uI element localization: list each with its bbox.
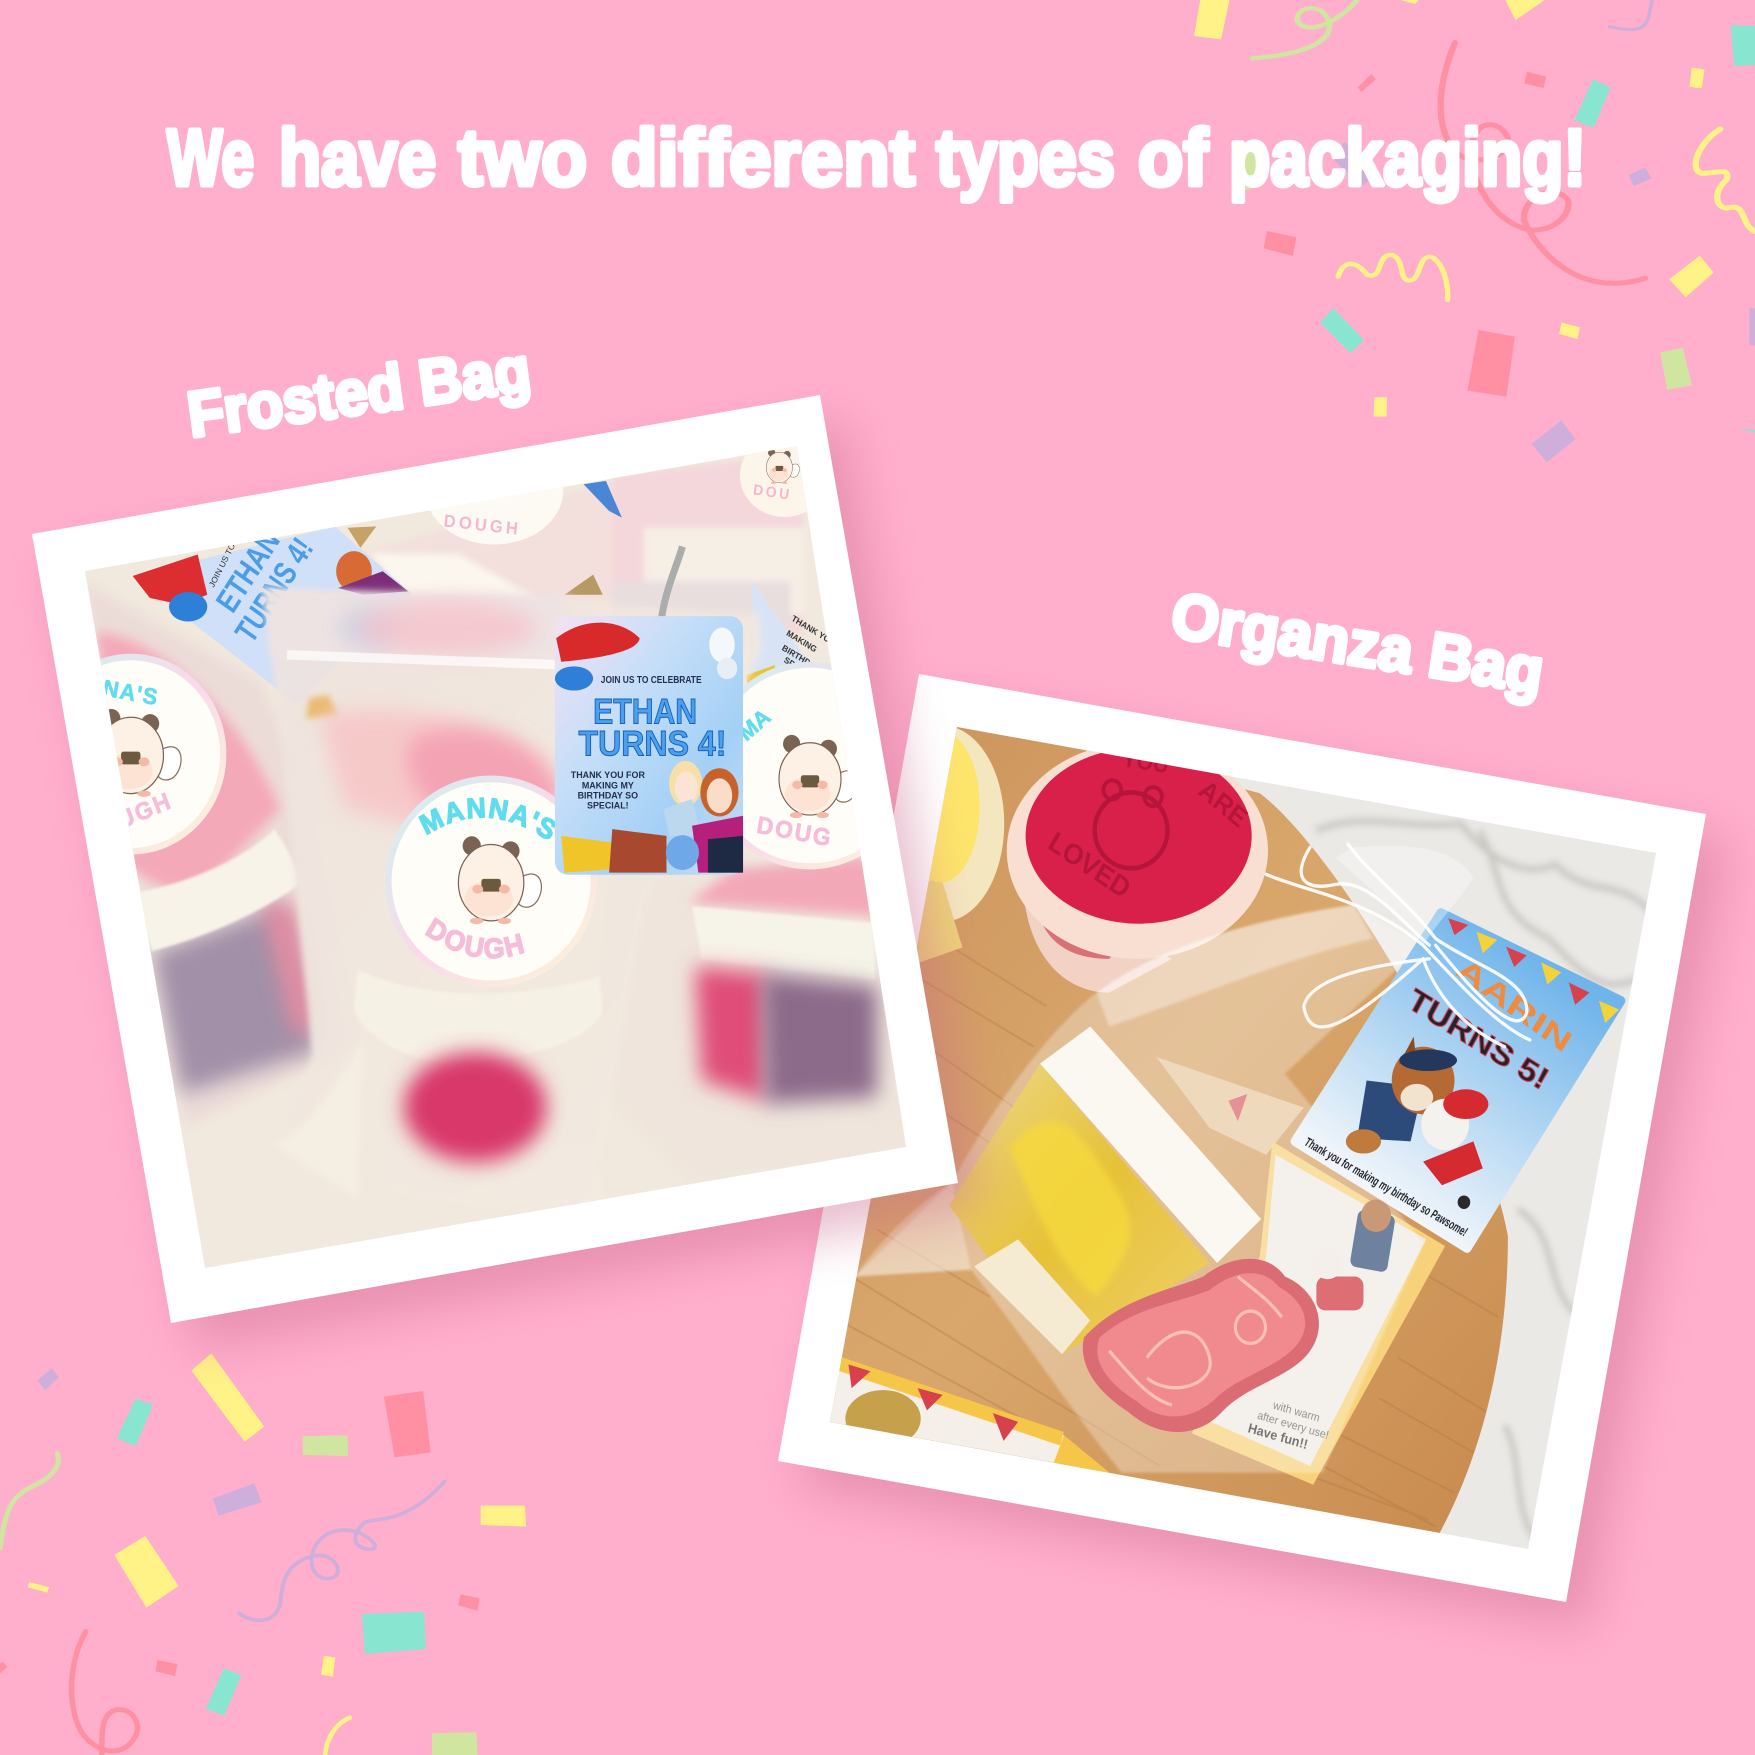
Elsa and Anna (663, 761, 743, 873)
gift tag: Ethan turns 4: JOIN US TO CELEBRATE (601, 675, 702, 686)
right jar bag: SPECIAL! (782, 655, 821, 684)
Manna's Dough sticker (385, 776, 597, 987)
Marshall (1421, 1089, 1488, 1209)
title: have (279, 113, 436, 202)
left jar bag: UGH (114, 787, 176, 834)
gift tag: Paw Patrol: Thank you for making my birthday so Pawsome! (1302, 1134, 1470, 1240)
right jar bag: MA (734, 704, 775, 746)
Manna's Dough sticker: DOUGH (424, 917, 524, 959)
red dough jar: ARE (1193, 774, 1253, 833)
title: packaging! (1229, 113, 1586, 202)
confetti: bottom left (0, 1353, 526, 1755)
hanging tag string (658, 546, 686, 616)
gift tag: Ethan turns 4: TURNS 4! (578, 725, 726, 764)
panel: organza bag photo (770, 661, 1755, 1628)
photo: frosted bag contents (85, 446, 906, 1268)
title: different (611, 113, 915, 202)
back bags: DOU (752, 482, 793, 504)
confetti: top right (1194, 0, 1755, 462)
yellow jar in bag (949, 1026, 1261, 1354)
back invitation card (132, 527, 411, 690)
photo: organza bag contents (830, 727, 1656, 1549)
back bags: DOUGH (443, 511, 522, 539)
back invitation card: TURNS 4! (228, 531, 320, 649)
right jar bag: MAKING (785, 628, 819, 655)
organza bag (855, 905, 1423, 1473)
title: We (167, 113, 254, 202)
title: types (936, 113, 1115, 202)
small card inside bag: after every use! (1256, 1410, 1330, 1442)
panel: frosted bag photo (32, 395, 994, 1366)
gift tag: Ethan turns 4: MAKING MY (582, 780, 634, 790)
right jar bag: THANK YOU (790, 613, 837, 648)
right jar bag: BIRTHDAY (780, 643, 822, 674)
gift tag: Ethan turns 4: ETHAN (593, 693, 697, 732)
title: two (458, 113, 587, 202)
gift tag: Ethan turns 4: THANK YOU FOR (571, 770, 645, 780)
heading: Organza Bag: Organza Bag (1167, 579, 1548, 707)
wooden board (830, 727, 1508, 1533)
small card inside bag: with warm (1271, 1399, 1321, 1425)
centre frosted bag (261, 587, 762, 1224)
title: of (1138, 113, 1208, 202)
gift tag: Paw Patrol (1295, 913, 1621, 1248)
pink cutter (1083, 1259, 1319, 1432)
yellow dough jar, open (916, 728, 1004, 962)
Manna's Dough sticker: MANNA'S (418, 797, 555, 840)
gift tag: Ethan turns 4 (555, 616, 743, 875)
gift tag: Ethan turns 4: BIRTHDAY SO (578, 790, 638, 800)
left jar bag (88, 590, 316, 1121)
back invitation card: JOIN US TO CE (207, 528, 244, 589)
small card inside bag (1156, 1057, 1445, 1485)
right jar bag: DOUG (755, 811, 835, 851)
red dough jar (1007, 743, 1268, 993)
car characters (555, 623, 737, 873)
bottom-left card (830, 1356, 1109, 1473)
gift tag: Ethan turns 4: SPECIAL! (587, 800, 629, 810)
heading: Frosted Bag: Frosted Bag (183, 333, 535, 451)
small card inside bag: Have fun!! (1247, 1420, 1310, 1452)
back invitation card: ETHAN (209, 523, 287, 619)
red dough jar: YOU (1121, 746, 1170, 778)
marble surface (1232, 776, 1656, 1549)
gift tag: Paw Patrol: TURNS 5! (1402, 983, 1554, 1097)
right jar bag (593, 581, 918, 1184)
red dough jar: LOVED (1043, 825, 1136, 904)
back bags (348, 446, 807, 634)
title (167, 113, 1586, 202)
gift tag: Paw Patrol: AARIN (1451, 952, 1577, 1059)
left jar bag: NA'S (101, 675, 161, 710)
ribbon (1266, 844, 1530, 1047)
Chase (1346, 1037, 1457, 1154)
